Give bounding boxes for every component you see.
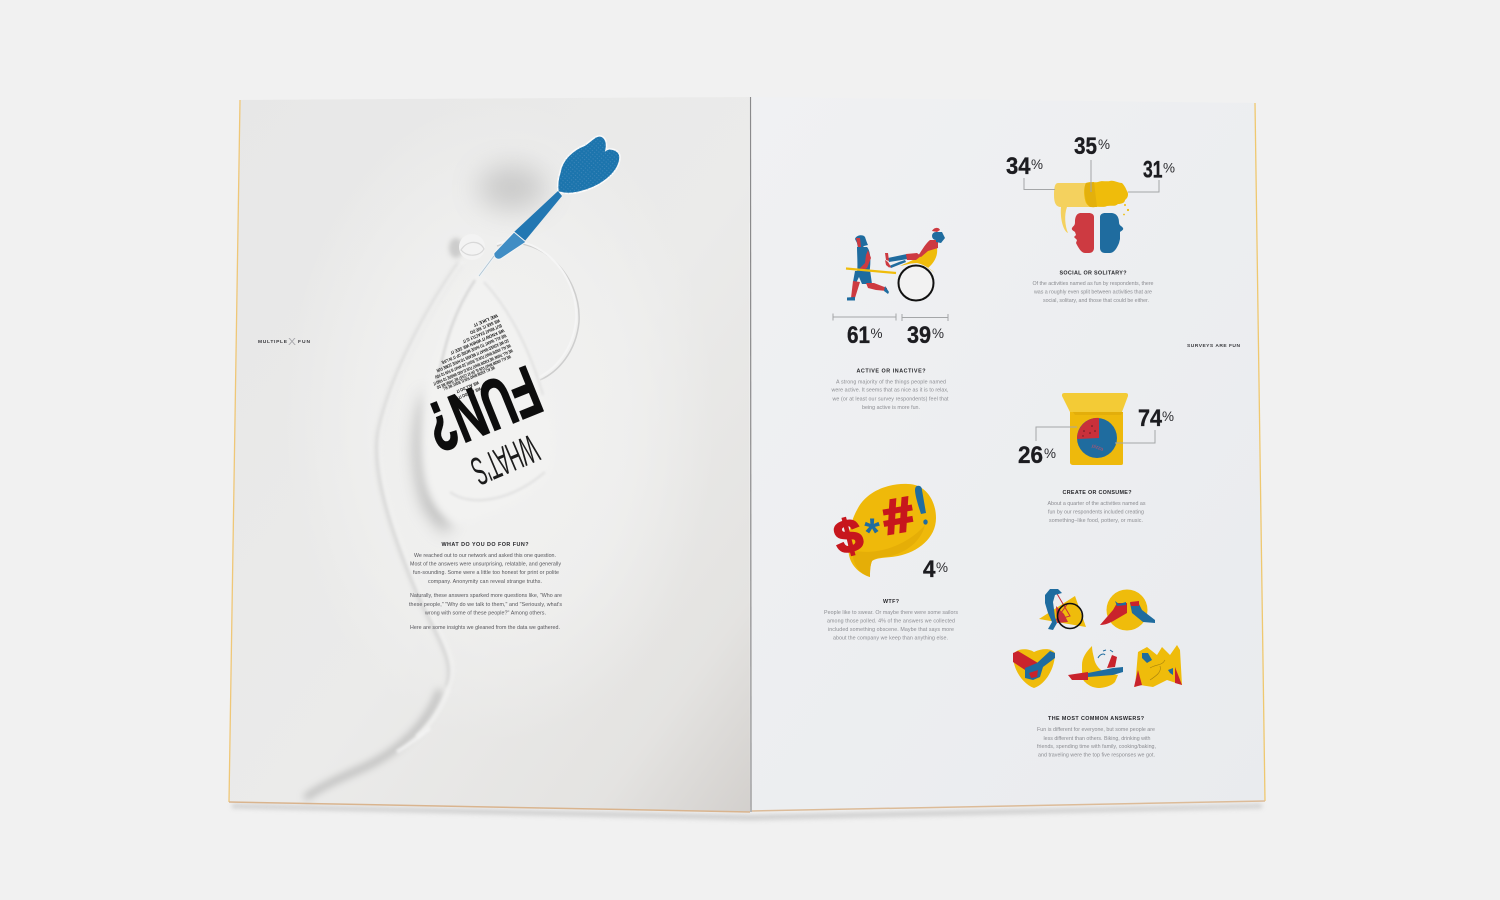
bag lettering: WE ALL DO IT — [457, 386, 482, 400]
body — [1048, 501, 1146, 524]
body: A strong majority of the things people named — [836, 380, 946, 386]
stat 39: % — [932, 326, 944, 341]
body: was a roughly even split between activities that are — [1034, 290, 1152, 296]
bag lettering: WE KNOW IT WHEN WE SEE IT — [450, 328, 505, 355]
bag lettering: WE LIKE IT — [472, 313, 499, 328]
body: being active is more fun. — [862, 405, 920, 411]
stat 34: % — [1031, 157, 1043, 172]
section: create or consume — [1018, 393, 1174, 524]
bag body — [421, 272, 553, 527]
photo: swatter in bag — [305, 136, 620, 798]
icon: travel map — [1134, 645, 1182, 687]
body: among those polled. 4% of the answers we collected — [827, 618, 955, 624]
stat 4 — [923, 556, 948, 583]
body: less different than others. Biking, drinking with — [1044, 736, 1151, 742]
body: People like to swear. Or maybe there were some sailors — [824, 610, 958, 616]
heading: THE MOST COMMON ANSWERS? — [1048, 716, 1144, 722]
bag folds — [437, 280, 545, 500]
text block: what do you do for fun: wrong with some of these people?" Among others. — [425, 610, 546, 616]
text block: what do you do for fun: Here are some insights we gleaned from the data we gathered. — [410, 625, 560, 631]
margin label: multiple x fun: X — [288, 337, 296, 348]
heading: SOCIAL OR SOLITARY? — [1060, 270, 1126, 276]
knot — [449, 234, 485, 260]
bag lettering: SO WE ASKED WHAT IT MEANS TO HAVE SOME FUN — [435, 338, 510, 373]
text block: what do you do for fun: fun-sounding. Some were a little too honest for print or polite — [413, 570, 559, 576]
bag lettering: WE ALL KNOW WHAT FUN IS, OR AT LEAST WE THINK WE DO — [436, 354, 512, 390]
icon: swearing speech bubble: # — [879, 488, 917, 545]
seat — [900, 248, 937, 273]
body: social, solitary, and those that could be either. — [1043, 298, 1149, 304]
stat 31: % — [1163, 160, 1175, 176]
swatter shadow — [478, 166, 546, 210]
bag lettering: WHAT'S — [465, 426, 545, 493]
panel: right page — [750, 97, 1265, 812]
icon: swearing speech bubble: * — [864, 511, 880, 555]
bag lettering: WE ALL THINK WE KNOW WHAT FUN IS AND WHERE TO FIND IT — [432, 348, 514, 386]
stat 34: 34 — [1006, 153, 1031, 180]
pole — [846, 268, 896, 273]
body: about the company we keep than anything else. — [833, 636, 948, 642]
icon: biking — [1039, 589, 1086, 630]
icon: pizza box: pizza — [1091, 443, 1104, 453]
bag lettering: WE ALL KNOW WHAT FUN IS, RIGHT, WE ALL — [442, 365, 496, 392]
stat 39: 39 — [907, 322, 931, 349]
stat 74: 74 — [1138, 405, 1163, 432]
body: Of the activities named as fun by respondents, there — [1032, 281, 1154, 287]
icon: family — [1013, 649, 1055, 688]
stat 35: % — [1098, 137, 1110, 152]
text block: what do you do for fun: company. Anonymity can reveal strange truths. — [428, 579, 542, 585]
stat 35: 35 — [1074, 133, 1097, 160]
icon: drinking — [1100, 590, 1155, 630]
bag lettering: WE ALL WANT TO HAVE MORE OF IT IN LIFE — [441, 333, 507, 365]
icon: pizza box — [1062, 393, 1128, 465]
body: we (or at least our survey respondents) feel that — [832, 396, 949, 402]
section: social or solitary — [1006, 133, 1175, 304]
stat 26: % — [1044, 446, 1056, 461]
section: active or inactive — [832, 228, 949, 411]
stat 31: 31 — [1143, 156, 1162, 184]
lower ribbon — [305, 261, 463, 798]
heading: CREATE OR CONSUME? — [1062, 490, 1132, 496]
bag lettering: BUT WHAT EXACTLY IS IT — [462, 323, 503, 344]
bag lettering: WE ALL KNOW WHAT FUN IS, RIGHT, SO WHAT IS FUN TO YOU — [434, 343, 512, 380]
margin label: multiple x fun: MULTIPLE — [258, 339, 288, 345]
bag lettering: WE SEE IT, WE DO — [469, 318, 501, 335]
body: something–like food, pottery, or music. — [1049, 518, 1143, 524]
icon: swearing speech bubble: $ — [829, 507, 868, 564]
body — [832, 380, 949, 411]
heading: WTF? — [883, 599, 899, 605]
text block: what do you do for fun: We reached out to our network and asked this one question. — [414, 553, 556, 559]
icon: runner pulling rickshaw — [846, 228, 945, 300]
page shadow — [232, 804, 1262, 820]
stat 61: 61 — [847, 322, 870, 349]
bag lettering — [415, 313, 552, 493]
icon: cooking — [1068, 646, 1123, 688]
passenger — [885, 228, 945, 268]
runner — [847, 235, 889, 300]
icon: swearing speech bubble — [829, 484, 936, 577]
text block: what do you do for fun: Naturally, these answers sparked more questions like, "Who are — [410, 593, 562, 599]
stat 4: % — [936, 560, 948, 575]
stat 4: 4 — [923, 556, 936, 583]
panel: left page — [229, 97, 750, 812]
stat 26: 26 — [1018, 442, 1043, 469]
body: friends, spending time with family, cooking/baking, — [1037, 744, 1156, 750]
margin label: multiple x fun — [258, 337, 310, 348]
body: were active. It seems that as nice as it is to relax, — [832, 388, 948, 394]
bag shadow — [414, 390, 456, 535]
body — [1032, 281, 1154, 304]
stat 61: % — [870, 326, 883, 341]
body — [824, 610, 958, 642]
right ribbon loop — [497, 241, 579, 380]
margin label: multiple x fun: FUN — [298, 339, 310, 345]
text block: what do you do for fun: WHAT DO YOU DO FOR FUN? — [442, 542, 528, 548]
leader lines — [1024, 160, 1159, 192]
text block: what do you do for fun: Most of the answers were unsurprising, relatable, and generally — [410, 562, 561, 568]
range lines — [833, 314, 948, 321]
leader lines — [1036, 427, 1155, 443]
text block: what do you do for fun — [409, 542, 562, 631]
bag lettering: WE ALL DO IT — [455, 380, 480, 394]
section: the most common answers — [1013, 589, 1182, 758]
body: and traveling were the top five responses we got. — [1038, 752, 1155, 758]
bag lettering: FUN? — [415, 351, 552, 467]
wheel — [898, 266, 934, 300]
margin label: surveys are fun: SURVEYS ARE FUN — [1187, 343, 1240, 349]
body: About a quarter of the activities named as — [1048, 501, 1146, 507]
fly swatter — [479, 136, 620, 276]
section: wtf — [824, 484, 958, 642]
body: included something obscene. Maybe that says more — [828, 627, 954, 633]
stat 74: % — [1162, 409, 1174, 424]
body: Fun is different for everyone, but some people are — [1037, 727, 1155, 733]
icon: speech and thought bubbles with faces — [1054, 181, 1129, 253]
text block: what do you do for fun: these people," "Why do we talk to them," and "Seriously, what's — [409, 602, 562, 608]
body — [1037, 727, 1156, 758]
body: fun by our respondents included creating — [1048, 510, 1144, 516]
heading: ACTIVE OR INACTIVE? — [856, 368, 926, 374]
